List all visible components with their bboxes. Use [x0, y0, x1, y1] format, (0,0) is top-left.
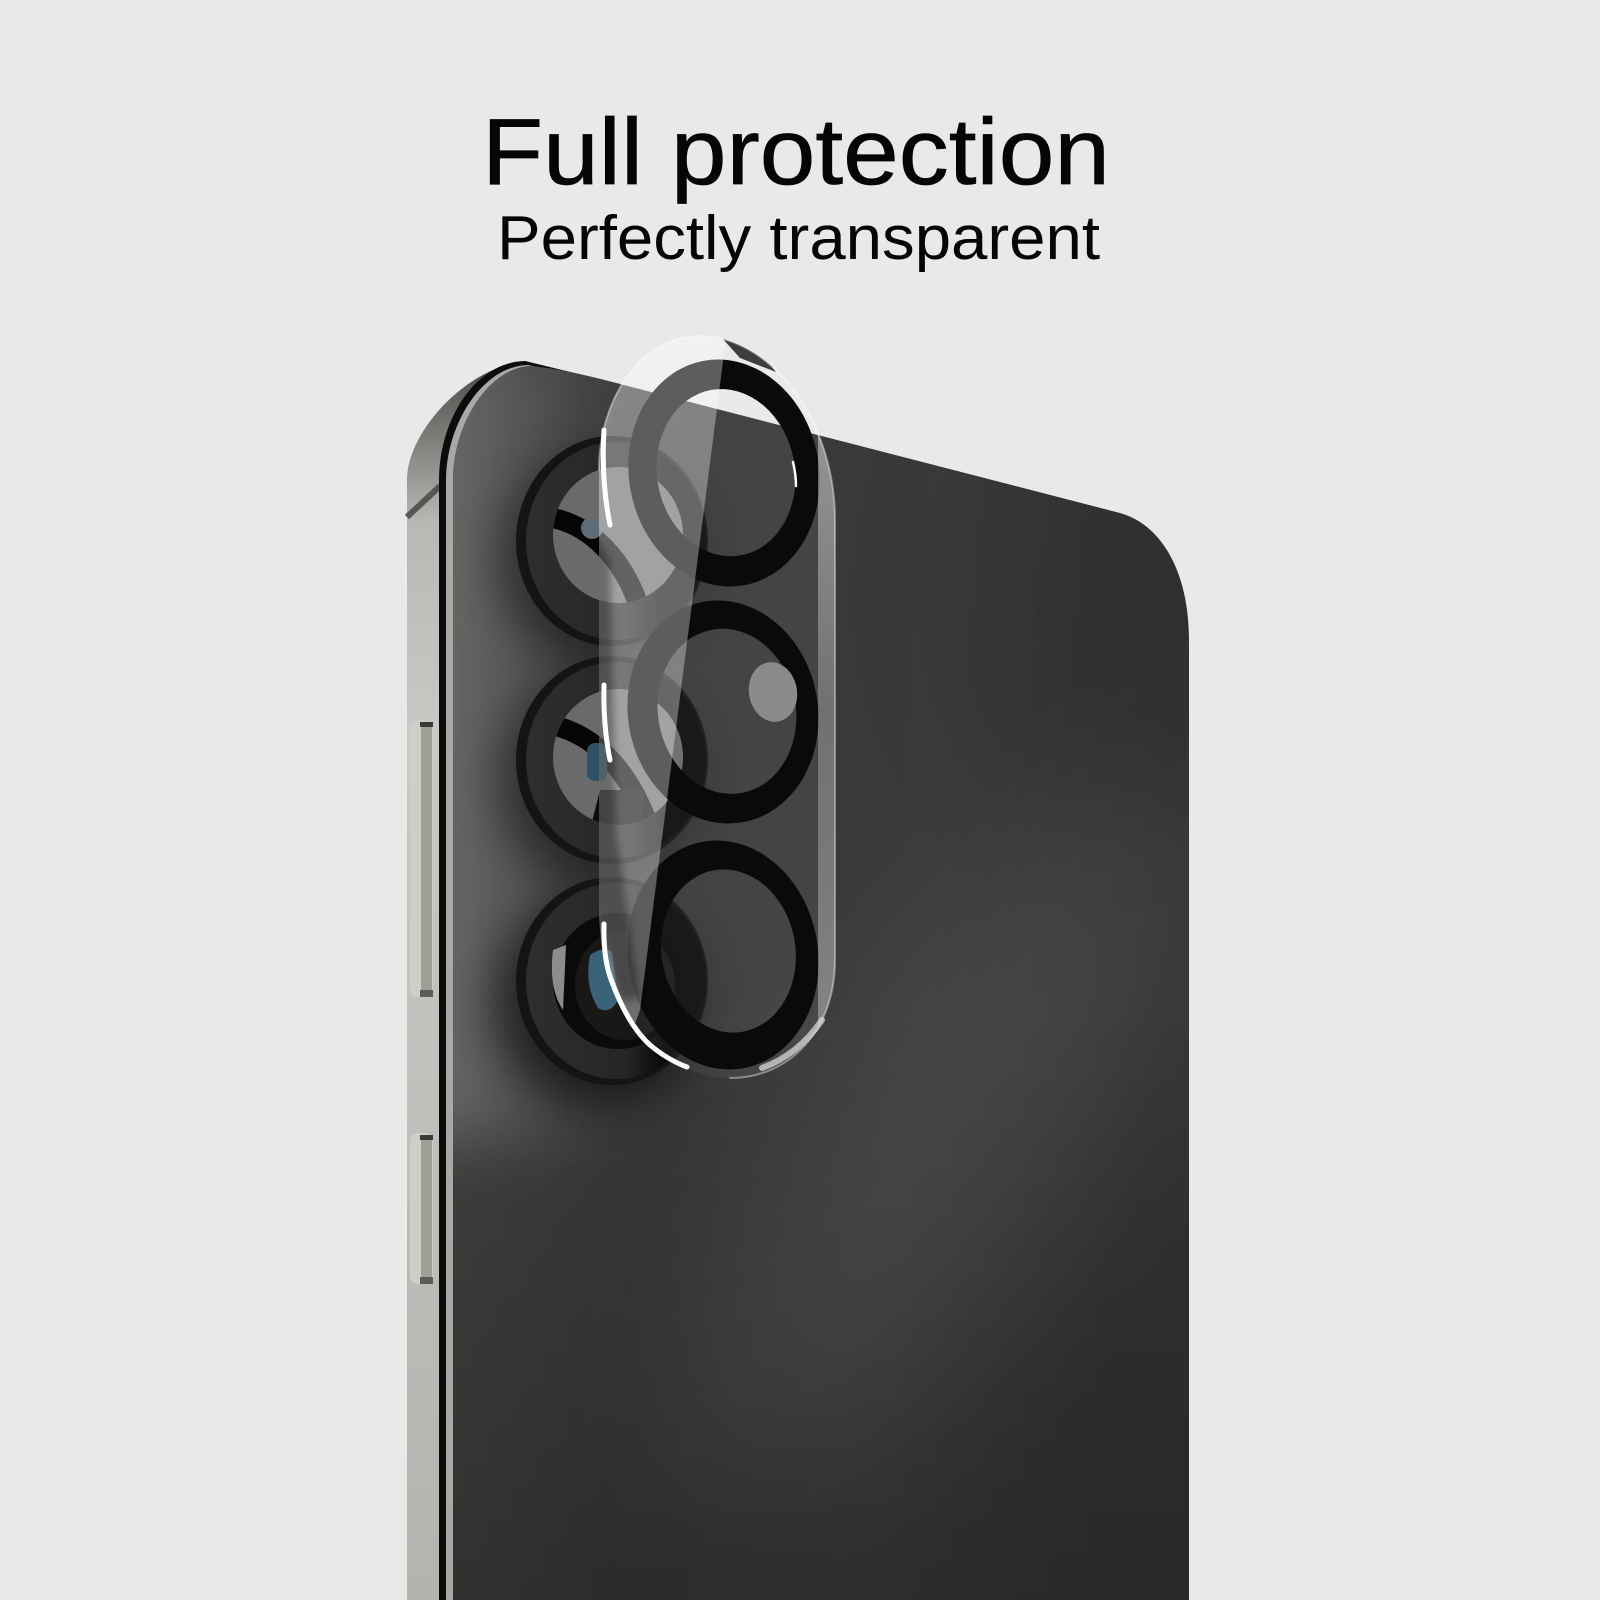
glass reflections [592, 330, 838, 1090]
blue lens glint [588, 949, 618, 1010]
glass body [599, 336, 835, 1078]
subheading: Perfectly transparent [497, 204, 1100, 273]
printed ring middle [610, 585, 836, 839]
phone frame [407, 362, 560, 1600]
camera lens bottom [516, 877, 708, 1085]
light inner rim [446, 365, 620, 1600]
title block [482, 99, 1110, 273]
phone flash seen through glass [744, 658, 802, 726]
antenna band [407, 482, 452, 517]
back panel shading [453, 339, 1189, 1600]
printed ring top [611, 344, 837, 602]
infographic canvas [405, 116, 1189, 1600]
printed ring bottom [609, 825, 837, 1085]
heading: Full protection [482, 99, 1110, 204]
side button lower [410, 1133, 433, 1284]
back panel [453, 366, 1189, 1600]
glass camera protector [592, 330, 838, 1090]
glass edge highlights [599, 336, 835, 1078]
camera lens middle [516, 656, 708, 864]
phone [405, 361, 1189, 1600]
side button upper [410, 720, 433, 997]
black edge gasket [439, 361, 620, 1600]
camera lens top [516, 436, 708, 646]
